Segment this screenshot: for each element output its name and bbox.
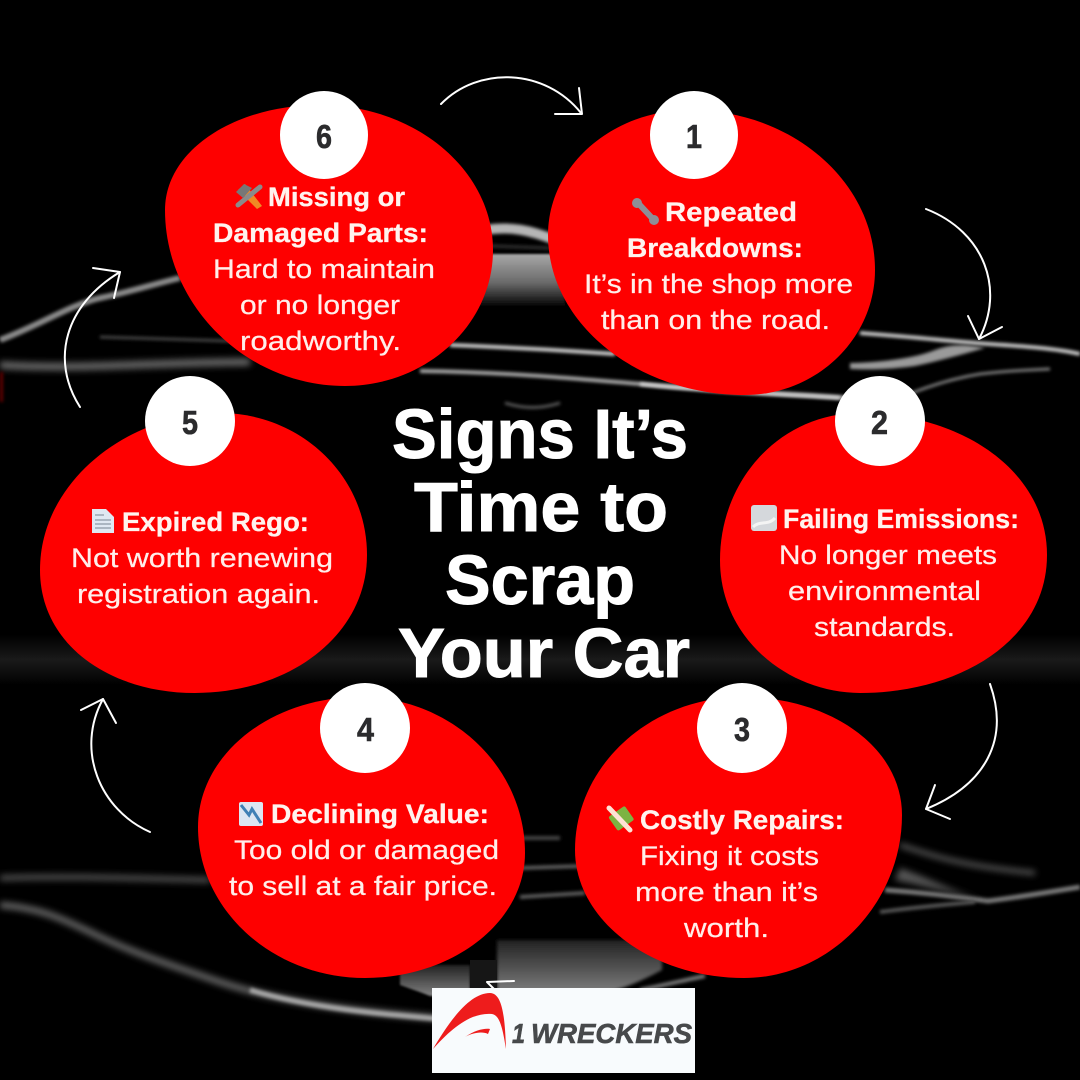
description 5: registration again. <box>77 579 320 609</box>
description 3: more than it’s <box>635 877 818 907</box>
heading 4: Declining Value: <box>271 799 489 829</box>
blob 6 <box>165 105 493 386</box>
number badge 6: 6 <box>316 118 332 155</box>
description 5: Not worth renewing <box>71 543 333 573</box>
description 6 <box>213 254 435 356</box>
number badge 3: 3 <box>734 711 750 748</box>
number badge 3 <box>697 683 787 773</box>
description 4: to sell at a fair price. <box>229 871 497 901</box>
description 2: environmental <box>788 576 981 606</box>
blob 3 <box>575 697 902 978</box>
arrow: step 6 to step 1 <box>441 77 582 114</box>
description 2: standards. <box>814 612 955 642</box>
description 2 <box>779 540 997 642</box>
number badge 4: 4 <box>357 711 375 748</box>
number badge 1: 1 <box>686 118 702 155</box>
number badge 4 <box>320 683 410 773</box>
panel: step 6 missing or damaged parts <box>165 91 493 386</box>
icon: smog <box>751 505 777 531</box>
arrow: step 3 to step 4, partly behind logo <box>487 981 514 992</box>
title: Signs It’s <box>392 395 688 473</box>
icon: declining chart <box>239 802 263 826</box>
panel: step 2 failing emissions <box>720 376 1047 693</box>
description 3: Fixing it costs <box>640 841 819 871</box>
blob 4 <box>198 697 525 978</box>
title: Your Car <box>398 614 690 692</box>
panel: step 1 repeated breakdowns <box>548 91 875 395</box>
icon: hammer and wrench <box>236 184 262 209</box>
description 2: No longer meets <box>779 540 997 570</box>
heading 2: Failing Emissions: <box>783 504 1019 534</box>
heading 1: Repeated <box>665 197 797 227</box>
number badge 1 <box>650 91 738 179</box>
description 4 <box>229 835 499 901</box>
icon: wrench <box>632 198 659 225</box>
description 3 <box>635 841 819 943</box>
logo: 1 Wreckers <box>432 988 695 1073</box>
blob 2 <box>720 413 1047 693</box>
heading 1 <box>627 197 803 263</box>
description 4: Too old or damaged <box>234 835 499 865</box>
description 6: roadworthy. <box>240 326 401 356</box>
description 6: Hard to maintain <box>213 254 435 284</box>
logo: 1 Wreckers: WRECKERS <box>531 1018 692 1049</box>
arrow: step 4 to step 5 <box>81 699 150 832</box>
title: Time to <box>414 468 668 546</box>
icon: money with wings <box>608 806 634 831</box>
blob 5 <box>40 413 367 693</box>
arrow: step 2 to step 3 <box>926 684 997 819</box>
number badge 5: 5 <box>182 404 198 441</box>
heading 1: Breakdowns: <box>627 233 803 263</box>
arrow: step 1 to step 2 <box>926 209 1002 339</box>
arrow: step 5 to step 6 <box>65 268 120 407</box>
panel: step 4 declining value <box>198 683 525 978</box>
heading 6 <box>213 182 428 248</box>
description 1: It’s in the shop more <box>584 269 853 299</box>
heading 6: Damaged Parts: <box>213 218 428 248</box>
logo: 1 Wreckers: 1 <box>512 1018 525 1049</box>
description 1: than on the road. <box>601 305 830 335</box>
title <box>392 395 690 692</box>
description 5 <box>71 543 333 609</box>
blob 1 <box>548 110 875 395</box>
icon: document <box>92 509 114 533</box>
heading 5: Expired Rego: <box>122 507 309 537</box>
title: Scrap <box>445 541 635 619</box>
description 6: or no longer <box>240 290 400 320</box>
description 1 <box>584 269 853 335</box>
panel: step 3 costly repairs <box>575 683 902 978</box>
description 3: worth. <box>683 913 769 943</box>
number badge 6 <box>280 91 368 179</box>
number badge 2: 2 <box>871 404 888 441</box>
number badge 5 <box>145 376 235 466</box>
number badge 2 <box>835 376 925 466</box>
heading 6: Missing or <box>268 182 405 212</box>
heading 3: Costly Repairs: <box>640 805 844 835</box>
panel: step 5 expired rego <box>40 376 367 693</box>
